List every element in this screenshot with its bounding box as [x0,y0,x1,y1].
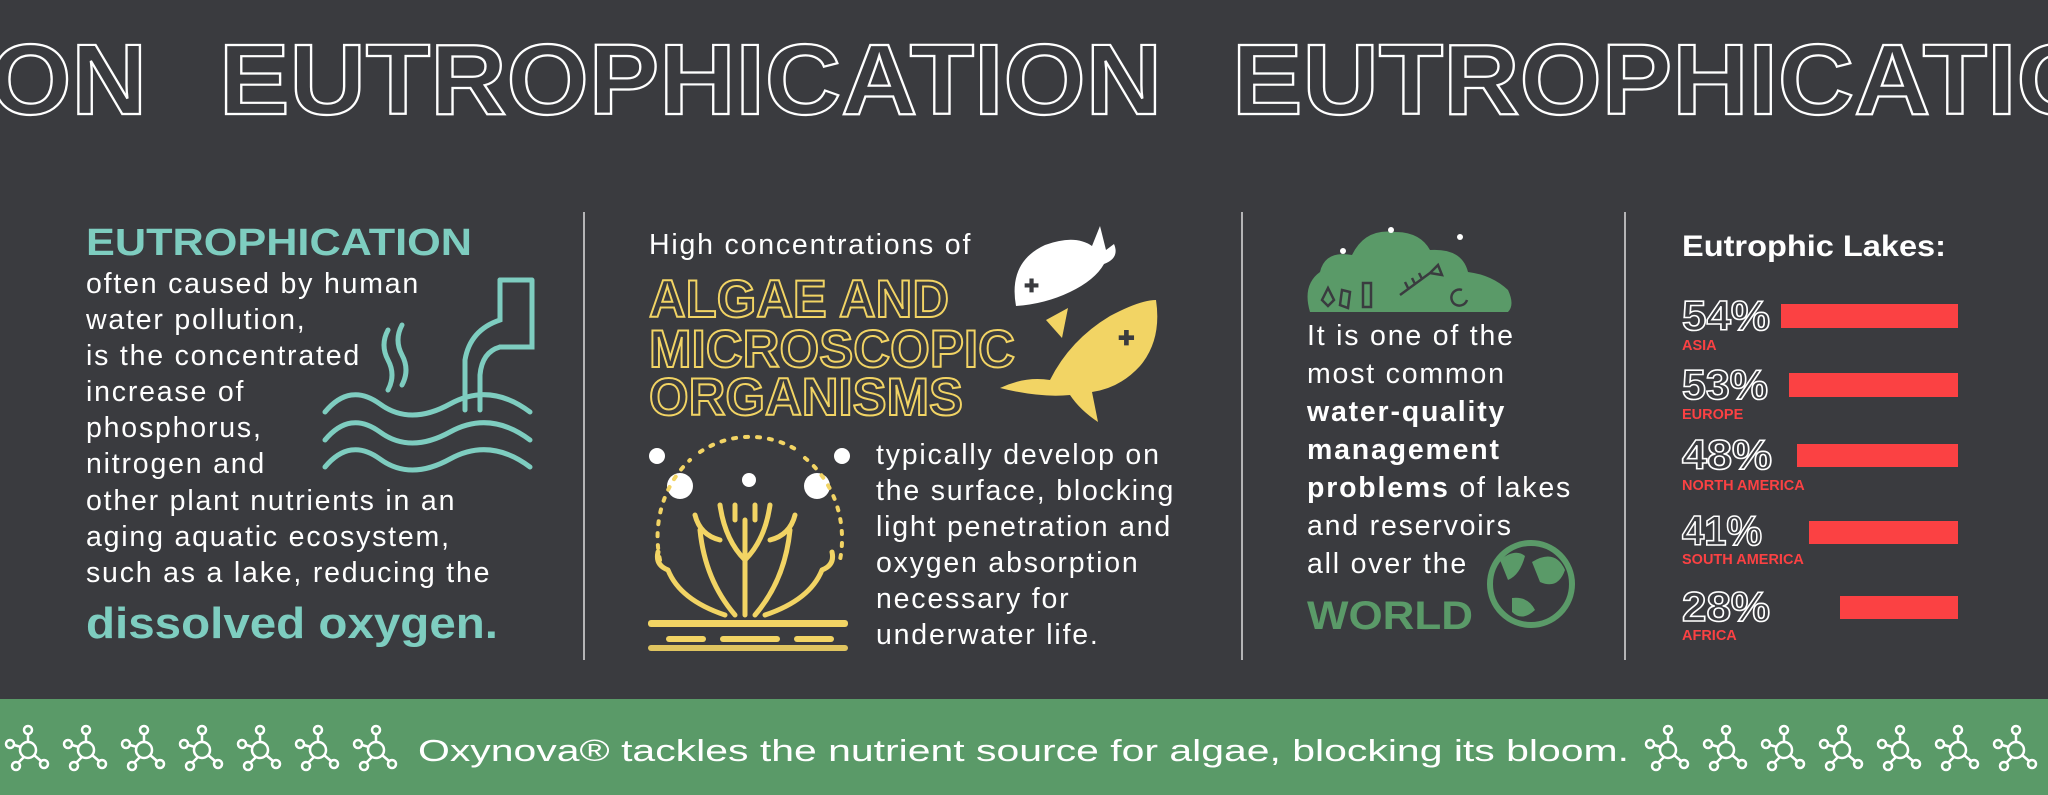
text: intro: High concentrations of [649,229,972,261]
icons: molecules right [1646,726,2036,770]
text block: algae effects [876,439,1175,651]
text block: definition: other plant nutrients in an [86,485,456,517]
text block: algae effects: oxygen absorption [876,547,1140,579]
panel: eutrophic lakes chart: 48% [1682,431,1772,478]
panel: world problem [1306,227,1572,638]
text block: algae effects: underwater life. [876,619,1100,651]
text block: algae effects: the surface, blocking [876,475,1175,507]
text: tagline: Oxynova® tackles the nutrient source for algae, blocking its bloom. [418,733,1629,768]
icon: white fish: ✚ [1024,276,1039,296]
text block: definition: aging aquatic ecosystem, [86,521,451,553]
text block: definition: phosphorus, [86,412,263,444]
panel: eutrophic lakes chart: EUROPE [1682,407,1744,423]
text block: definition: often caused by human [86,268,420,300]
text block: definition: water pollution, [85,304,306,336]
panel: eutrophic lakes chart: 28% [1682,583,1770,630]
text block: definition: increase of [86,376,245,408]
icons: molecules left [6,726,396,770]
text block: common problem: all over the [1307,548,1468,580]
bar chart [1781,304,1958,619]
panel: eutrophic lakes chart: AFRICA [1682,628,1737,644]
title: outline marquee [0,24,2048,136]
title: outline marquee: EUTROPHICATION [219,24,1162,136]
text block: common problem: most common [1307,358,1506,390]
text block: common problem: It is one of the [1307,320,1515,352]
panel: eutrophic lakes chart: ASIA [1682,338,1717,354]
text block: definition: such as a lake, reducing the [86,557,491,589]
text block: definition: is the concentrated [86,340,361,372]
panel: eutrophic lakes chart: NORTH AMERICA [1682,478,1805,494]
heading: algae outline: ORGANISMS [649,368,963,427]
panel: eutrophic lakes chart: 54% [1682,292,1770,339]
icon: globe [1490,543,1572,625]
text block: definition: nitrogen and [86,448,266,480]
icon: pipe discharging into water [325,280,532,470]
heading: algae outline: ALGAE AND [649,270,949,329]
heading: algae outline [649,270,1015,427]
panel: eutrophic lakes chart: SOUTH AMERICA [1682,552,1804,568]
text block: common problem: and reservoirs [1307,510,1513,542]
footer band [0,699,2048,795]
panel: eutrophic lakes chart [1682,230,1958,644]
heading: Eutrophic Lakes: Eutrophic Lakes: [1682,230,1946,263]
icon: polluted cloud [1308,227,1512,312]
text block: common problem: water-quality [1306,396,1506,428]
panel: eutrophication definition [85,222,532,648]
text: WORLD: WORLD [1307,594,1473,638]
text block: common problem [1306,320,1572,580]
icon: white fish [1015,226,1116,306]
text block: definition [85,268,491,589]
heading: algae outline: MICROSCOPIC [649,320,1015,379]
icon: yellow fish: ✚ [1118,328,1135,350]
icon: yellow fish [1000,300,1157,422]
text block: algae effects: typically develop on [876,439,1161,471]
panel: algae [648,226,1175,651]
panel: eutrophic lakes chart: 53% [1682,361,1768,408]
text block: algae effects: necessary for [876,583,1070,615]
text block: algae effects: light penetration and [876,511,1172,543]
text block: common problem: management [1307,434,1501,466]
icon: coral with bubbles [648,437,850,651]
text: dissolved oxygen: dissolved oxygen. [86,599,498,648]
heading: EUTROPHICATION: EUTROPHICATION [86,222,472,264]
panel: eutrophic lakes chart: 41% [1682,507,1762,554]
text block: common problem: problems of lakes [1307,472,1572,504]
